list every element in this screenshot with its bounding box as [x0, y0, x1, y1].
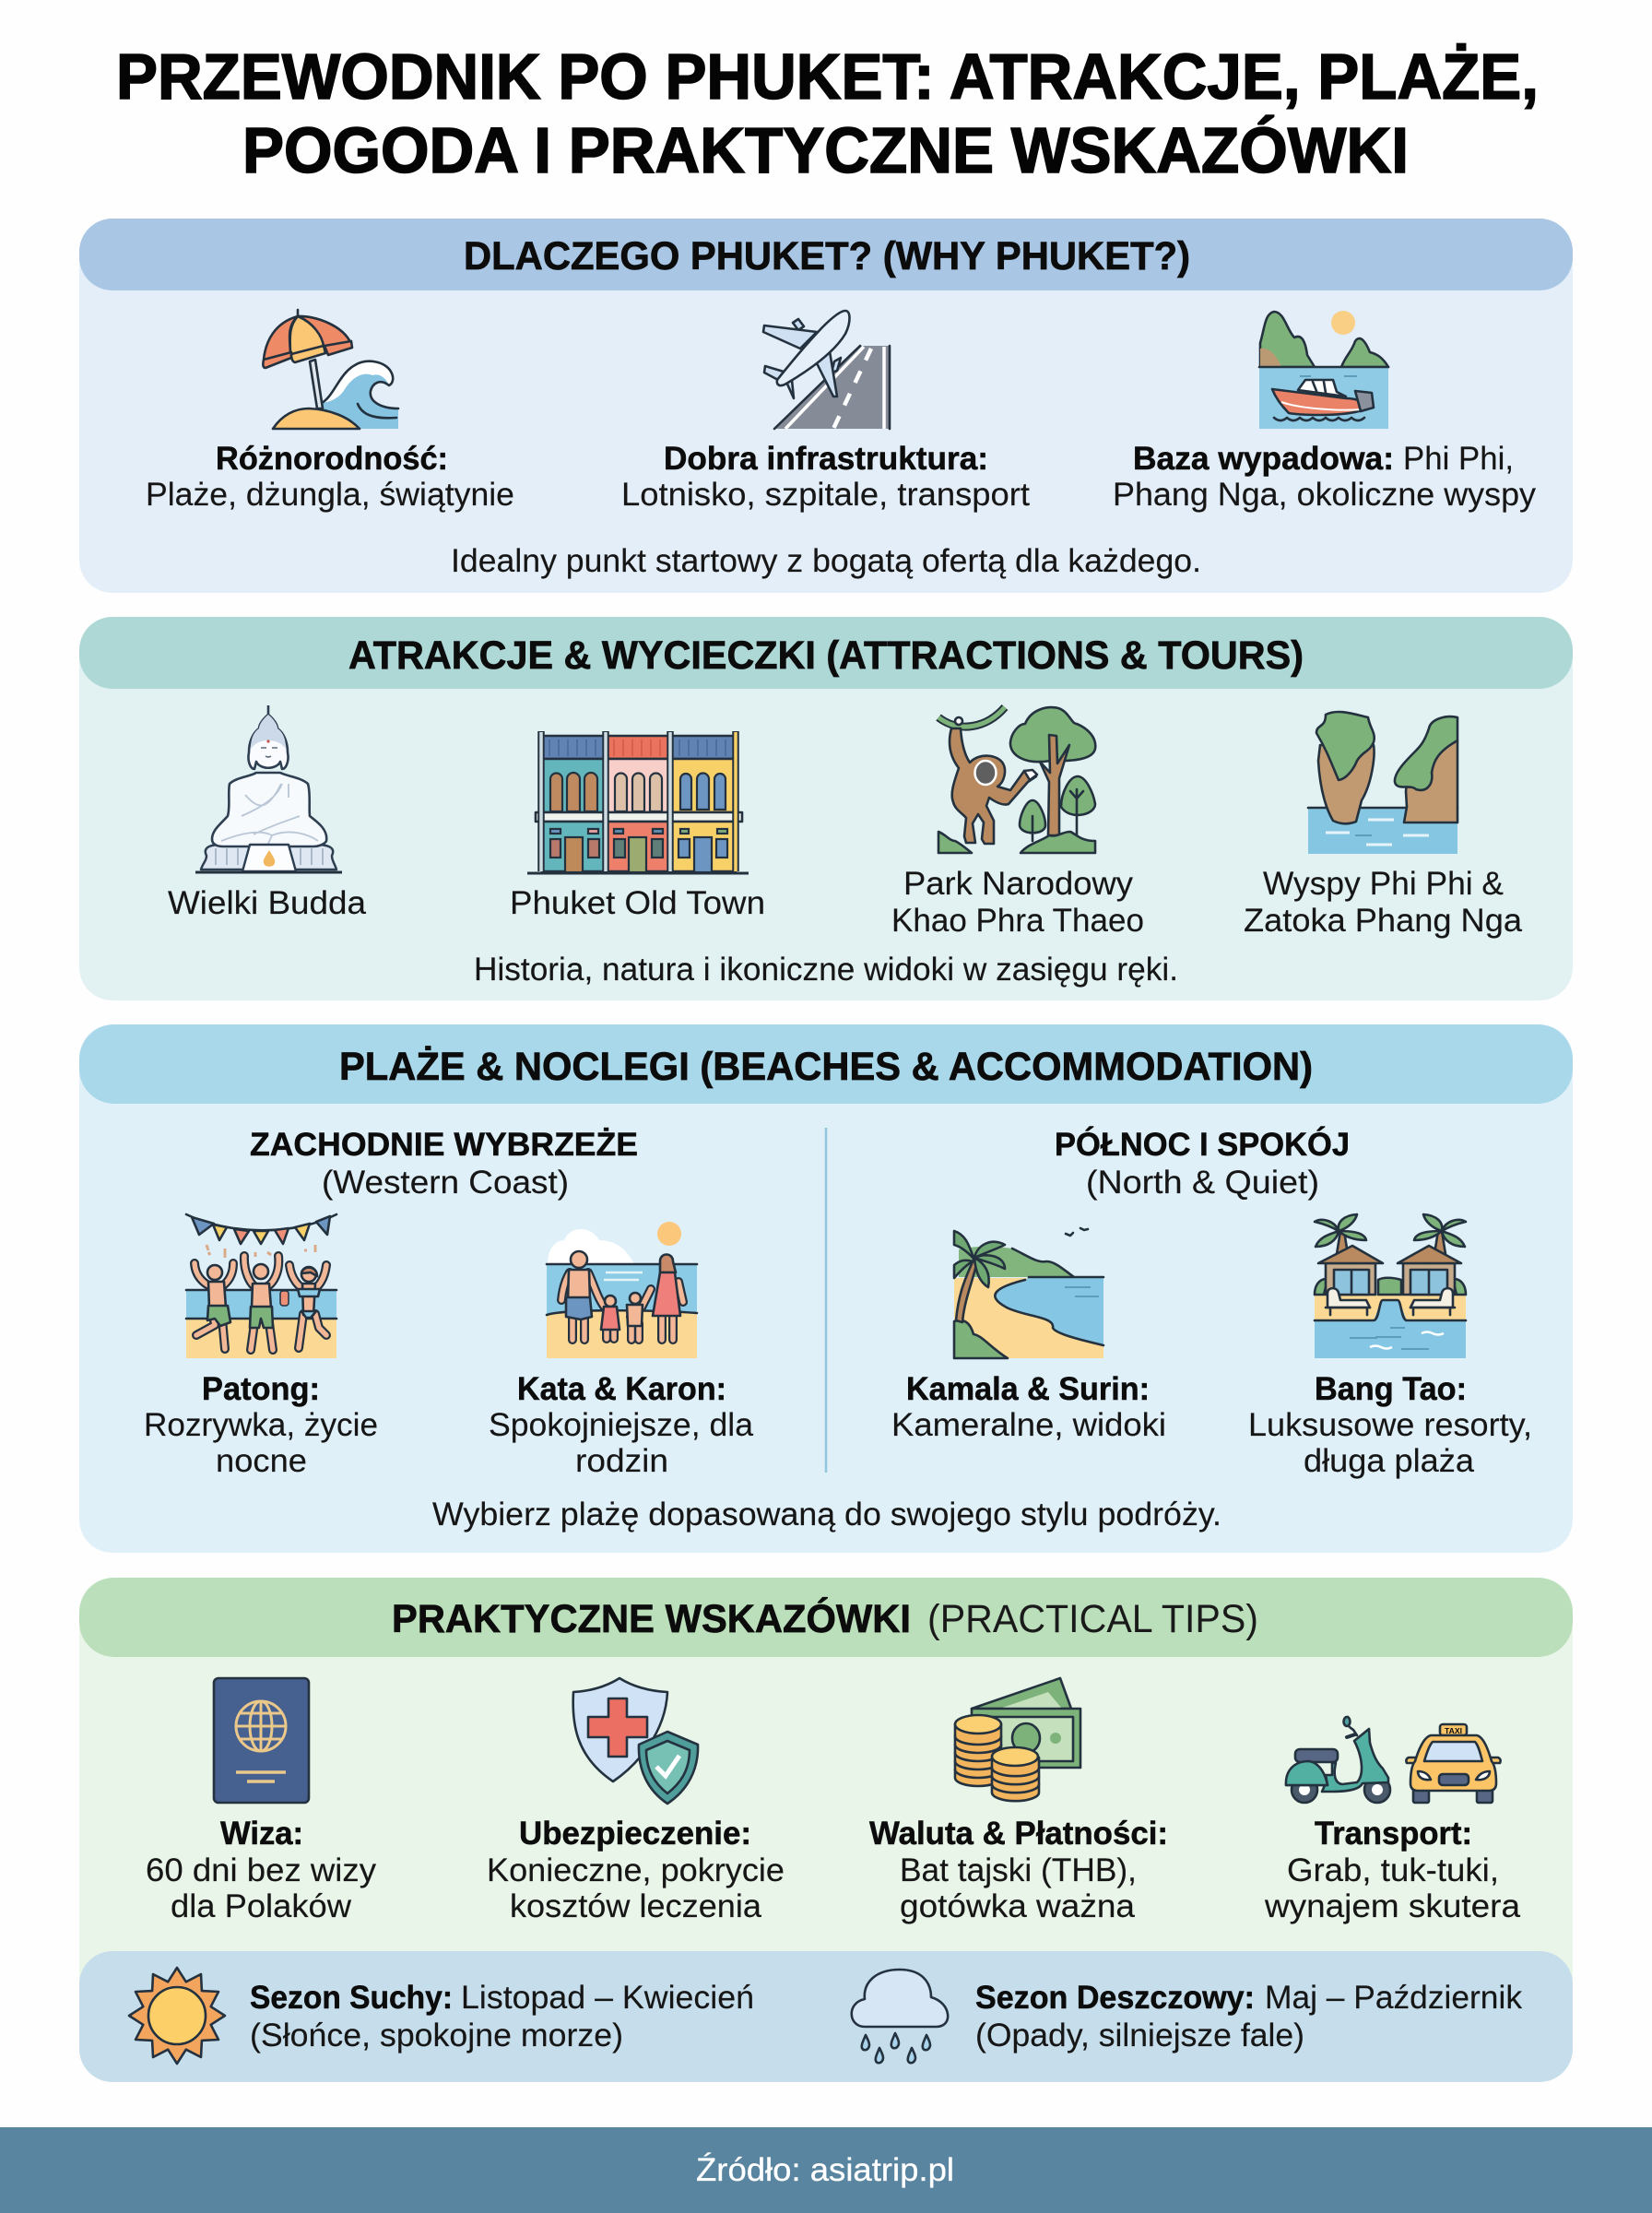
text: Patong: Patong: [202, 1371, 320, 1407]
text: Kamala and Surin [891, 1371, 1166, 1443]
text: currency: Bat tajski (THB), [900, 1852, 1137, 1888]
panel header: why Phuket [79, 219, 1573, 290]
icon: gibbon and trees [938, 707, 1095, 853]
text: infrastructure: Dobra infrastruktura: [664, 441, 988, 477]
subheading: western coast: (Western Coast) [322, 1165, 569, 1201]
icon: sun [129, 1968, 225, 2064]
icon: scooter and taxi [1286, 1717, 1501, 1803]
icon: rain cloud [852, 1970, 948, 2063]
text: transport: wynajem skutera [1264, 1888, 1521, 1924]
text: diversity: Różnorodność: [216, 441, 448, 477]
subheading: western coast: ZACHODNIE WYBRZEŻE [250, 1127, 638, 1163]
label: Big Buddha: Wielki Budda [168, 885, 367, 921]
text: Kamala and Surin: Kamala & Surin: [906, 1371, 1150, 1407]
text: Kata and Karon: rodzin [575, 1443, 668, 1479]
panel header: attractions [79, 617, 1573, 689]
text: visa: dla Polaków [171, 1888, 352, 1924]
text: rainy season: Maj – Październik [1265, 1980, 1522, 2016]
caption: why Phuket: Idealny punkt startowy z bogatą ofertą dla każdego. [451, 543, 1201, 579]
panel header: practical tips [79, 1578, 1573, 1657]
text: Bang Tao: długa plaża [1304, 1443, 1475, 1479]
text: currency: Waluta & Płatności: [869, 1816, 1168, 1852]
text: base for trips: Baza wypadowa: [1133, 441, 1394, 477]
icon: family on beach [547, 1222, 697, 1358]
text: rainy season: (Opady, silniejsze fale) [975, 2018, 1304, 2053]
subheading: north and quiet: PÓŁNOC I SPOKÓJ [1055, 1126, 1350, 1163]
text: rainy season [975, 1980, 1522, 2053]
text: transport: Transport: [1315, 1816, 1472, 1852]
text: base for trips [1113, 441, 1537, 513]
icon: Kamala cove [954, 1228, 1103, 1358]
text: Bang Tao: Bang Tao: [1315, 1371, 1467, 1407]
footer: Źródło: asiatrip.pl [696, 2152, 954, 2188]
label: islands: Wyspy Phi Phi & [1263, 866, 1504, 902]
icon: limestone islands and water [1308, 712, 1457, 854]
text: currency: gotówka ważna [900, 1888, 1136, 1924]
icon: insurance shields [573, 1678, 698, 1804]
icon: plane over runway [763, 311, 890, 429]
text: Patong [144, 1371, 378, 1479]
panel header: beaches: PLAŻE & NOCLEGI (BEACHES & ACCOMMODATION) [339, 1045, 1313, 1089]
label: national park [891, 866, 1144, 939]
panel header: practical tips: (PRACTICAL TIPS) [927, 1597, 1258, 1641]
panel: beaches [79, 1024, 1573, 1553]
panel header: why Phuket: DLACZEGO PHUKET? (WHY PHUKET?) [464, 234, 1190, 278]
text: infrastructure: Lotnisko, szpitale, transport [621, 477, 1030, 513]
label: islands [1244, 866, 1523, 939]
text: infrastructure [621, 441, 1030, 513]
icon: Patong party [186, 1214, 336, 1358]
text: Kata and Karon [489, 1371, 754, 1479]
text: visa [146, 1816, 377, 1924]
title: POGODA I PRAKTYCZNE WSKAZÓWKI [242, 114, 1409, 186]
title [116, 41, 1539, 186]
label: Phuket Old Town: Phuket Old Town [510, 885, 765, 921]
subheading: western coast [250, 1127, 638, 1201]
icon: boat between islands [1259, 311, 1388, 429]
text: Kamala and Surin: Kameralne, widoki [891, 1407, 1166, 1443]
text: Bang Tao: Luksusowe resorty, [1248, 1407, 1532, 1443]
panel header: attractions: ATRAKCJE & WYCIECZKI (ATTRACTIONS & TOURS) [348, 633, 1304, 678]
icon: scooter and taxi: TAXI [1445, 1727, 1462, 1735]
text: transport: Grab, tuk-tuki, [1287, 1852, 1499, 1888]
text: insurance: Ubezpieczenie: [519, 1816, 751, 1852]
text: Patong: nocne [216, 1443, 307, 1479]
text: diversity: Plaże, dżungla, świątynie [146, 477, 514, 513]
title: PRZEWODNIK PO PHUKET: ATRAKCJE, PLAŻE, [116, 41, 1539, 112]
icon: passport [214, 1678, 309, 1803]
text: dry season: Listopad – Kwiecień [461, 1980, 754, 2016]
subheading: north and quiet: (North & Quiet) [1086, 1165, 1319, 1201]
icon: beach umbrella and wave [263, 310, 398, 429]
text: Patong: Rozrywka, życie [144, 1407, 378, 1443]
text: insurance: kosztów leczenia [510, 1888, 762, 1924]
text: base for trips: Phang Nga, okoliczne wyspy [1113, 477, 1537, 513]
text: currency [869, 1816, 1168, 1924]
text: insurance: Konieczne, pokrycie [487, 1852, 785, 1888]
panel header: practical tips: PRAKTYCZNE WSKAZÓWKI [392, 1596, 911, 1641]
text: dry season: Sezon Suchy: [250, 1980, 453, 2016]
caption: attractions: Historia, natura i ikoniczne widoki w zasięgu ręki. [474, 952, 1178, 988]
text: Kata and Karon: Kata & Karon: [517, 1371, 726, 1407]
text: rainy season: Sezon Deszczowy: [975, 1980, 1255, 2016]
icon: Big Buddha [195, 705, 342, 872]
text: dry season: (Słońce, spokojne morze) [250, 2018, 623, 2053]
label: islands: Zatoka Phang Nga [1244, 903, 1523, 939]
text: transport [1264, 1816, 1521, 1924]
label: national park: Park Narodowy [903, 866, 1134, 902]
text: Kata and Karon: Spokojniejsze, dla [489, 1407, 754, 1443]
panel: attractions [79, 617, 1573, 1000]
panel: why Phuket [79, 219, 1573, 593]
text: visa: Wiza: [220, 1816, 303, 1852]
footer [0, 2127, 1652, 2213]
panel: weather seasons [79, 1951, 1573, 2082]
icon: money and coins [955, 1678, 1080, 1801]
icon: Old Town shophouses [527, 731, 749, 873]
text: insurance [487, 1816, 785, 1924]
label: national park: Khao Phra Thaeo [891, 903, 1144, 939]
text: visa: 60 dni bez wizy [146, 1852, 377, 1888]
text: base for trips: Phi Phi, [1403, 441, 1514, 477]
text: dry season [250, 1980, 754, 2053]
caption: beaches: Wybierz plażę dopasowaną do swojego stylu podróży. [432, 1497, 1221, 1533]
icon: Bang Tao villas [1315, 1214, 1466, 1358]
panel header: beaches [79, 1024, 1573, 1104]
panel: practical tips [79, 1578, 1573, 2082]
text: Bang Tao [1248, 1371, 1532, 1479]
text: diversity [146, 441, 514, 513]
subheading: north and quiet [1055, 1126, 1350, 1201]
